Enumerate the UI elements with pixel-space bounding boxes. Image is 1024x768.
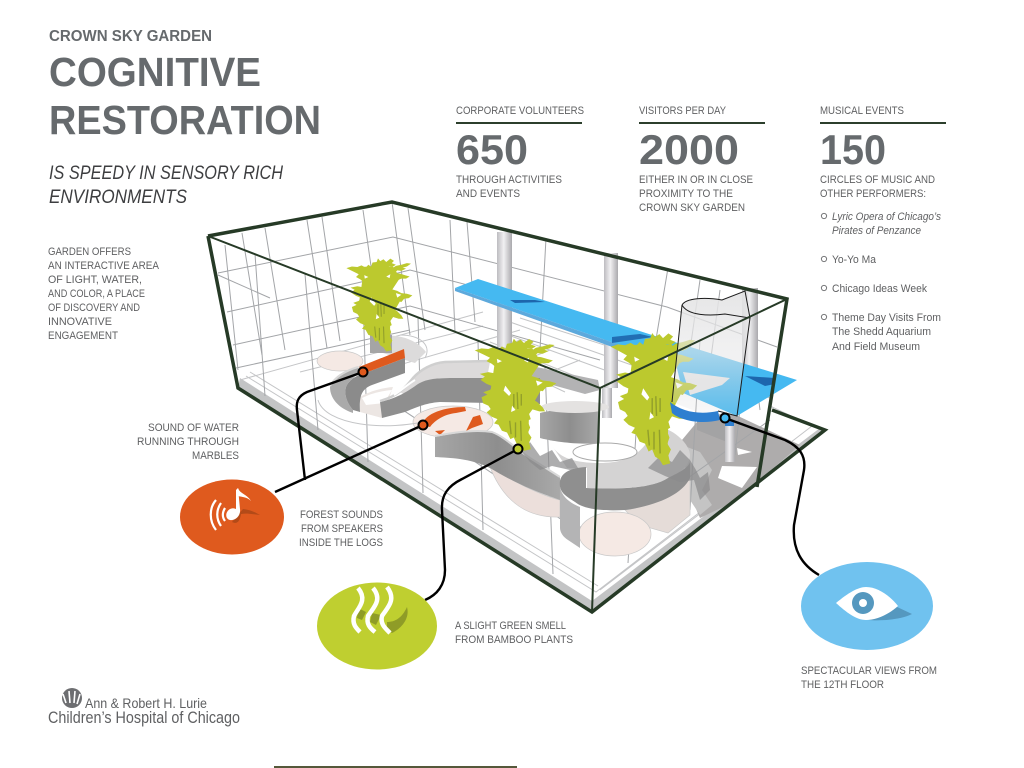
- stat: musical events: CIRCLES OF MUSIC AND: [820, 174, 935, 186]
- paving: back: [378, 336, 426, 363]
- label: spectacular views: SPECTACULAR VIEWS FROM: [801, 665, 937, 677]
- front wall grid: [255, 254, 750, 574]
- label: green smell: FROM BAMBOO PLANTS: [455, 634, 573, 646]
- title: RESTORATION: [49, 97, 321, 143]
- stat: corporate volunteers: THROUGH ACTIVITIES: [456, 174, 562, 186]
- curved wall: lower S: [435, 431, 560, 500]
- intro text block: AND COLOR, A PLACE: [48, 288, 145, 300]
- paving: centre disc: [553, 427, 690, 489]
- icon: scent waves: [317, 582, 437, 670]
- performers list: Chicago Ideas Week: [832, 283, 927, 295]
- floor inner edges: [240, 312, 812, 592]
- intro text block: AN INTERACTIVE AREA: [48, 260, 160, 272]
- orange logs: centre: [422, 407, 483, 435]
- column: left: [497, 232, 512, 347]
- stat: corporate volunteers: 650: [456, 126, 528, 173]
- stat: corporate volunteers: CORPORATE VOLUNTEERS: [456, 105, 584, 117]
- bamboo shadows: [522, 442, 710, 500]
- loop floor: [360, 387, 393, 418]
- title: COGNITIVE: [49, 49, 261, 95]
- back wall grid: [218, 202, 777, 410]
- label: forest sounds: FOREST SOUNDS: [300, 509, 383, 521]
- outer planter rings: [318, 335, 432, 426]
- label: spectacular views: THE 12TH FLOOR: [801, 679, 884, 691]
- curved wall: back loop: [330, 358, 405, 413]
- intro text block: OF DISCOVERY AND: [48, 302, 140, 314]
- stat: corporate volunteers: AND EVENTS: [456, 188, 520, 200]
- bamboo tree: right: [611, 333, 697, 465]
- intro text block: OF LIGHT, WATER,: [48, 274, 142, 286]
- gray floor at right: [682, 413, 800, 518]
- curved wall: upper S: [380, 361, 540, 418]
- label: forest sounds: [299, 509, 383, 549]
- performers list: Lyric Opera of Chicago’s: [832, 211, 941, 223]
- performers list: [821, 211, 941, 353]
- stat: musical events: [820, 105, 946, 353]
- label: green smell: A SLIGHT GREEN SMELL: [455, 620, 566, 632]
- tree planter base: [370, 335, 392, 353]
- blue platform: [455, 279, 797, 416]
- eyebrow: Crown Sky Garden: CROWN SKY GARDEN: [49, 28, 212, 45]
- icon: hand: [62, 688, 82, 708]
- bottom image sliver: [274, 766, 517, 768]
- pink ground shapes: [317, 351, 690, 556]
- stat: musical events: OTHER PERFORMERS:: [820, 188, 926, 200]
- title: [49, 49, 321, 143]
- label: forest sounds: INSIDE THE LOGS: [299, 537, 383, 549]
- label: sound of water: RUNNING THROUGH: [137, 436, 239, 448]
- leader: water marbles to music icon: [297, 368, 368, 480]
- stat: visitors per day: VISITORS PER DAY: [639, 105, 727, 117]
- stat: musical events: 150: [820, 126, 886, 173]
- shadows on floor: [520, 365, 600, 394]
- intro text block: INNOVATIVE: [48, 316, 112, 328]
- column: right: [742, 288, 758, 383]
- icon: music note sound: [180, 480, 284, 554]
- leader: bamboo smell: [425, 444, 522, 600]
- floor grid: [480, 322, 640, 392]
- stat: visitors per day: 2000: [639, 126, 739, 173]
- logo: Lurie Children's: Children’s Hospital of Chicago: [48, 708, 240, 727]
- intro text block: ENGAGEMENT: [48, 330, 118, 342]
- label: green smell: [455, 620, 573, 646]
- stat: visitors per day: [639, 105, 765, 214]
- intro text block: GARDEN OFFERS: [48, 246, 131, 258]
- garden 3D diagram: [208, 202, 825, 612]
- orange log: back: [359, 349, 405, 373]
- icon: eye: [801, 562, 933, 650]
- performers list: And Field Museum: [832, 341, 920, 353]
- label: sound of water: MARBLES: [192, 450, 239, 462]
- subtitle: ENVIRONMENTS: [49, 186, 187, 208]
- leader: forest sounds to music icon: [275, 420, 428, 492]
- performers list: The Shedd Aquarium: [832, 326, 931, 338]
- logo: Lurie Children's: Ann & Robert H. Lurie: [85, 695, 207, 711]
- bamboo tree: centre: [475, 339, 556, 451]
- stat: musical events: MUSICAL EVENTS: [820, 105, 904, 117]
- glass box frame: [208, 202, 825, 612]
- glass water cylinder: [670, 291, 750, 422]
- heading block: [49, 28, 321, 208]
- performers list: Yo-Yo Ma: [832, 254, 877, 266]
- label: sound of water: SOUND OF WATER: [148, 422, 239, 434]
- stat: corporate volunteers: [456, 105, 584, 200]
- intro text block: [48, 246, 160, 342]
- floor slab: [238, 320, 825, 612]
- bamboo tree: back: [346, 258, 412, 352]
- leader: views: [720, 414, 819, 575]
- stat: visitors per day: PROXIMITY TO THE: [639, 188, 733, 200]
- performers list: Theme Day Visits From: [832, 312, 941, 324]
- column: centre: [604, 253, 618, 388]
- label: sound of water: [137, 422, 239, 462]
- curved wall: middle segment: [540, 408, 600, 444]
- subtitle: [49, 162, 284, 208]
- stat: visitors per day: EITHER IN OR IN CLOSE: [639, 174, 753, 186]
- stat: visitors per day: CROWN SKY GARDEN: [639, 202, 745, 214]
- label: forest sounds: FROM SPEAKERS: [301, 523, 383, 535]
- curved wall: front loop: [560, 462, 690, 548]
- subtitle: IS SPEEDY IN SENSORY RICH: [49, 162, 284, 184]
- label: spectacular views: [801, 665, 937, 691]
- performers list: Pirates of Penzance: [832, 225, 921, 237]
- logo: Lurie Children's: [48, 688, 240, 727]
